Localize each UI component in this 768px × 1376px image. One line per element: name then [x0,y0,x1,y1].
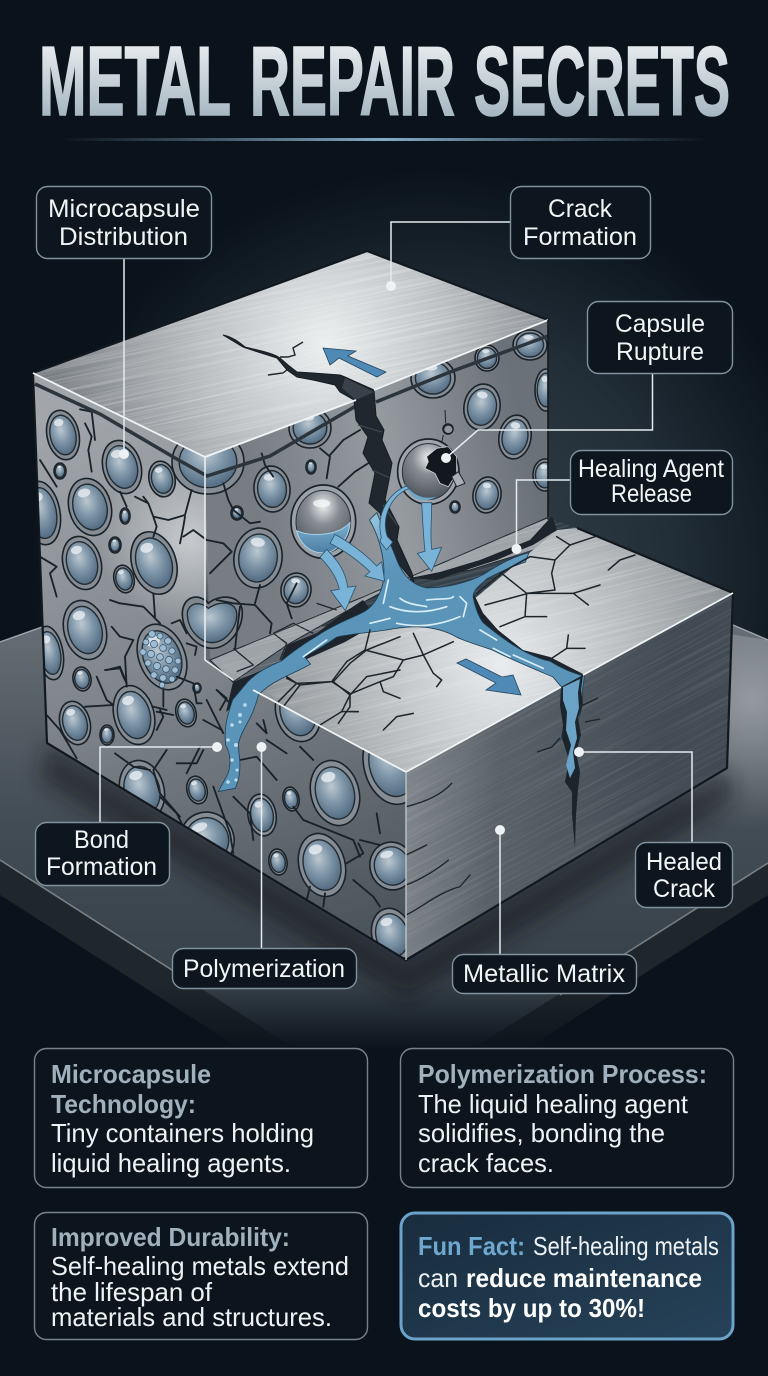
label: Microcapsule Distribution: Microcapsule [48,195,200,223]
card: Microcapsule Technology: Microcapsule [51,1059,211,1089]
rim shadows under top surface [35,336,548,476]
card: Fun Fact callout: reduce maintenance [466,1263,702,1293]
title [39,26,730,136]
label: Capsule Rupture [441,302,732,463]
wall crack network [40,409,373,733]
label: Healed Crack [574,747,732,908]
label: Crack Formation: Crack [548,195,612,223]
card: Polymerization Process: The liquid healing agent [418,1089,689,1119]
right face of lower block [406,593,733,960]
card: Improved Durability: Self-healing metals extend [51,1251,349,1281]
left wall highlight [100,450,280,630]
composite metal block illustration [32,250,734,961]
card: Improved Durability: materials and structures. [51,1302,332,1332]
dark crack along right stream [470,590,585,680]
healing agent pool and streams [219,513,584,791]
card: Polymerization Process: crack faces. [418,1148,554,1178]
card: Microcapsule Technology: Technology: [51,1089,196,1119]
flow arrows from capsules [320,486,442,611]
card: Fun Fact callout: costs by up to 30%! [418,1293,645,1323]
card: Improved Durability [34,1212,368,1340]
ledge cracks [233,603,337,672]
card: Microcapsule Technology: Tiny containers holding [51,1118,314,1148]
label: Healing Agent Release [512,450,732,554]
seams on right face near front edge [406,783,470,915]
lower left surface cracks [278,637,400,725]
arrow: rupture to crack [380,486,409,550]
direction arrow lower [457,659,521,695]
card: Fun Fact callout [401,1213,733,1339]
label: Healing Agent Release: Healing Agent [578,455,724,483]
upper right wall [205,320,548,660]
arrow: sphere downward [320,549,356,611]
heart-shaped merged capsule [182,597,242,648]
ledge in front of upper wall [210,518,557,682]
dark crack under left stream [226,600,380,712]
label: Bond Formation: Bond [74,826,129,854]
deep crack in upper block [223,335,414,582]
label: Metallic Matrix: Metallic Matrix [463,960,625,988]
card: Improved Durability: Improved Durability: [51,1222,290,1252]
label: Bond Formation: Formation [46,853,157,881]
left wall of block [33,373,406,960]
healed crack on right face [537,675,600,848]
card: Polymerization Process: Polymerization Process: [418,1059,707,1089]
card: Fun Fact callout: Fun Fact: [418,1231,525,1261]
card: Polymerization Process [400,1048,734,1188]
dark crack under right-up stream [410,516,557,580]
title: REPAIR [250,26,455,136]
microcapsules embedded in walls [19,330,557,966]
label: Healed Crack: Healed [646,848,722,876]
arrow: sphere to crack [330,534,385,581]
card: Improved Durability: the lifespan of [51,1277,213,1307]
lower wall cracks [47,667,380,907]
label: Healing Agent Release: Release [611,480,692,508]
packed microcapsule cluster [128,617,196,697]
label: Metallic Matrix [452,825,636,994]
brushed streaks on right face [407,596,732,936]
arrow: rupture downward [417,503,442,571]
title: METAL [39,26,231,136]
label: Crack Formation [386,186,650,291]
direction arrow upper [323,348,386,377]
metal base plate [0,620,768,1170]
background glow [0,170,768,1050]
label: Capsule Rupture: Capsule [615,310,705,338]
upper top surface [33,251,548,457]
label: Capsule Rupture: Rupture [616,338,704,366]
card: Microcapsule Technology [34,1048,368,1188]
brushed metal streaks [36,254,544,456]
label: Bond Formation [36,742,222,886]
lower surface crack network [283,537,635,730]
label: Polymerization [172,742,356,988]
large capsule releasing liquid [291,485,356,558]
label: Microcapsule Distribution: Distribution [59,223,188,251]
label: Polymerization: Polymerization [183,955,345,983]
ruptured capsule [398,410,465,504]
label: Microcapsule Distribution [36,186,212,459]
title divider [60,138,708,141]
lower top surface [233,528,733,772]
label: Healed Crack: Crack [653,875,715,903]
label: Crack Formation: Formation [523,223,637,251]
card: Fun Fact callout: can [418,1263,458,1293]
block edges and highlights [33,251,733,960]
card: Polymerization Process: solidifies, bonding the [418,1118,665,1148]
brushed metal streaks lower [222,519,721,770]
card: Fun Fact callout: Self-healing metals [533,1231,719,1261]
card: Microcapsule Technology: liquid healing agents. [51,1148,291,1178]
